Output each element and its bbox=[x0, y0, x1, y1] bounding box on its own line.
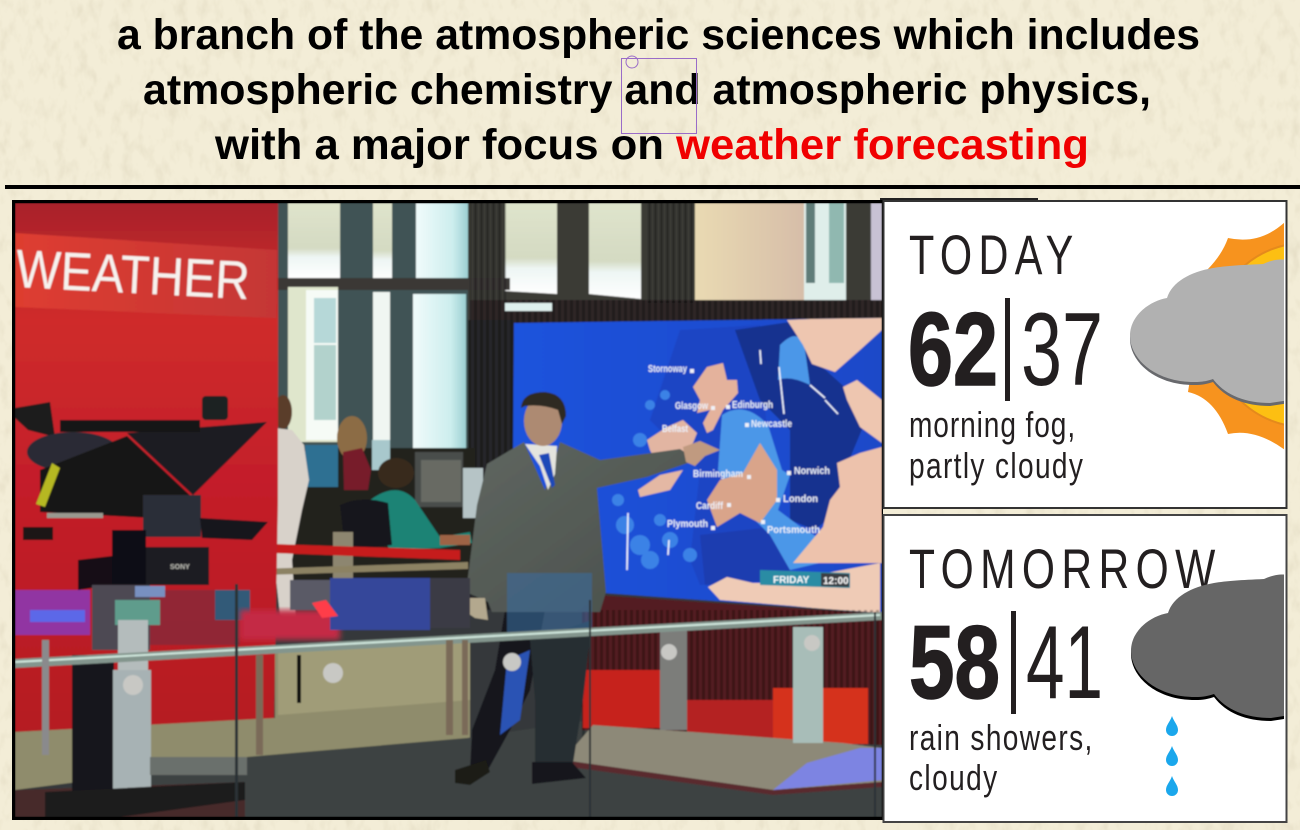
city labels: London bbox=[783, 493, 818, 505]
title: atmospheric chemistry and atmospheric physics, bbox=[143, 66, 1151, 114]
land: Ireland bbox=[646, 418, 698, 454]
glass tint over legs bbox=[507, 573, 592, 633]
city labels: Belfast bbox=[662, 423, 688, 435]
tie bbox=[539, 453, 555, 488]
icon: rain drops bbox=[1166, 716, 1178, 796]
glass balustrade posts bbox=[660, 627, 823, 743]
glass reflection band bbox=[15, 578, 470, 650]
north sea bbox=[735, 322, 870, 530]
conditions text: rain showers, bbox=[909, 718, 1092, 758]
city labels: Edinburgh bbox=[732, 399, 773, 411]
studio camera: SONY bbox=[170, 564, 190, 571]
title: with a major focus on bbox=[214, 121, 664, 169]
temperature divider bbox=[1005, 298, 1010, 401]
viewfinder bbox=[15, 402, 55, 437]
monitor: blue bbox=[305, 445, 338, 487]
rail standoffs bbox=[42, 635, 820, 755]
maroon panel under screen bbox=[582, 594, 882, 745]
monitor arm shelf bbox=[200, 518, 268, 540]
title bbox=[117, 11, 1200, 169]
studio camera bbox=[15, 396, 268, 590]
city labels: Plymouth bbox=[667, 518, 708, 530]
prompter hood bbox=[127, 422, 267, 495]
panel: tomorrow forecast bbox=[884, 515, 1291, 822]
icon: sun behind cloud bbox=[1130, 222, 1300, 450]
office chair bbox=[340, 499, 392, 550]
man in white shirt bbox=[274, 395, 309, 620]
office staff in background bbox=[275, 394, 484, 614]
monitors: desk bbox=[415, 452, 463, 507]
high temperature: 62 bbox=[908, 292, 998, 408]
conditions text bbox=[909, 405, 1084, 486]
wall sign: WEATHER bbox=[14, 239, 251, 311]
map time banner: 12:00 bbox=[823, 576, 849, 587]
icon: rain cloud bbox=[1131, 574, 1291, 721]
city labels bbox=[648, 363, 830, 536]
glass panel edges bbox=[235, 584, 876, 817]
pan head box bbox=[133, 547, 209, 585]
camera body bbox=[27, 432, 119, 472]
brass rail bbox=[276, 561, 469, 576]
studio background bbox=[18, 585, 871, 790]
title: a branch of the atmospheric sciences which includes bbox=[117, 11, 1200, 59]
windows bbox=[278, 203, 882, 610]
conditions text bbox=[909, 718, 1092, 798]
floor bbox=[15, 640, 882, 817]
shirt bbox=[525, 444, 557, 490]
map time banner: FRIDAY bbox=[773, 575, 810, 586]
heading: tomorrow: TOMORROW bbox=[909, 537, 1215, 600]
city labels: Portsmouth bbox=[767, 524, 820, 536]
map video wall bbox=[510, 316, 885, 616]
city labels: Norwich bbox=[794, 465, 830, 477]
western sea bbox=[650, 326, 766, 584]
city labels: Glasgow bbox=[675, 400, 709, 412]
yellow cable coil bbox=[36, 463, 60, 507]
shoes bbox=[455, 760, 586, 785]
city labels: Cardiff bbox=[696, 500, 723, 512]
rain streaks bbox=[624, 348, 840, 572]
conditions text: partly cloudy bbox=[909, 446, 1084, 486]
land: England and Wales bbox=[707, 443, 777, 527]
red studio wall bbox=[14, 203, 278, 732]
temperature divider bbox=[1011, 611, 1016, 714]
map time banner bbox=[760, 570, 850, 588]
seated man in teal shirt bbox=[364, 458, 472, 550]
camera pedestal bbox=[45, 620, 247, 817]
highlighted phrase: weather forecasting bbox=[675, 121, 1089, 169]
conditions text: cloudy bbox=[909, 758, 998, 798]
selection box artifact bbox=[622, 56, 696, 134]
woman in maroon top bbox=[337, 416, 371, 490]
city labels: Birmingham bbox=[693, 468, 743, 480]
pointing hand bbox=[683, 441, 720, 466]
land: Norway bbox=[787, 316, 882, 372]
rain bands bbox=[717, 335, 818, 570]
heading: today: TODAY bbox=[909, 224, 1073, 287]
land: continent bbox=[793, 447, 882, 563]
low temperature: 37 bbox=[1021, 292, 1103, 408]
land: Scotland bbox=[693, 363, 738, 433]
red rope bbox=[273, 544, 460, 560]
jacket bbox=[466, 442, 697, 612]
city labels: Newcastle bbox=[751, 418, 792, 430]
lower hand bbox=[466, 598, 488, 620]
city labels: Stornoway bbox=[648, 363, 687, 375]
trousers bbox=[470, 610, 592, 770]
head bbox=[521, 392, 566, 446]
low temperature: 41 bbox=[1026, 605, 1103, 721]
presenter bbox=[455, 392, 720, 785]
balustrade rail bbox=[15, 612, 882, 668]
high temperature: 58 bbox=[909, 605, 1000, 721]
panel: today forecast bbox=[884, 201, 1300, 508]
stage platform bbox=[563, 725, 882, 795]
photo: weather presenter in tv studio bbox=[12, 198, 1038, 820]
conditions text: morning fog, bbox=[909, 405, 1075, 445]
divider rule bbox=[5, 185, 1300, 189]
